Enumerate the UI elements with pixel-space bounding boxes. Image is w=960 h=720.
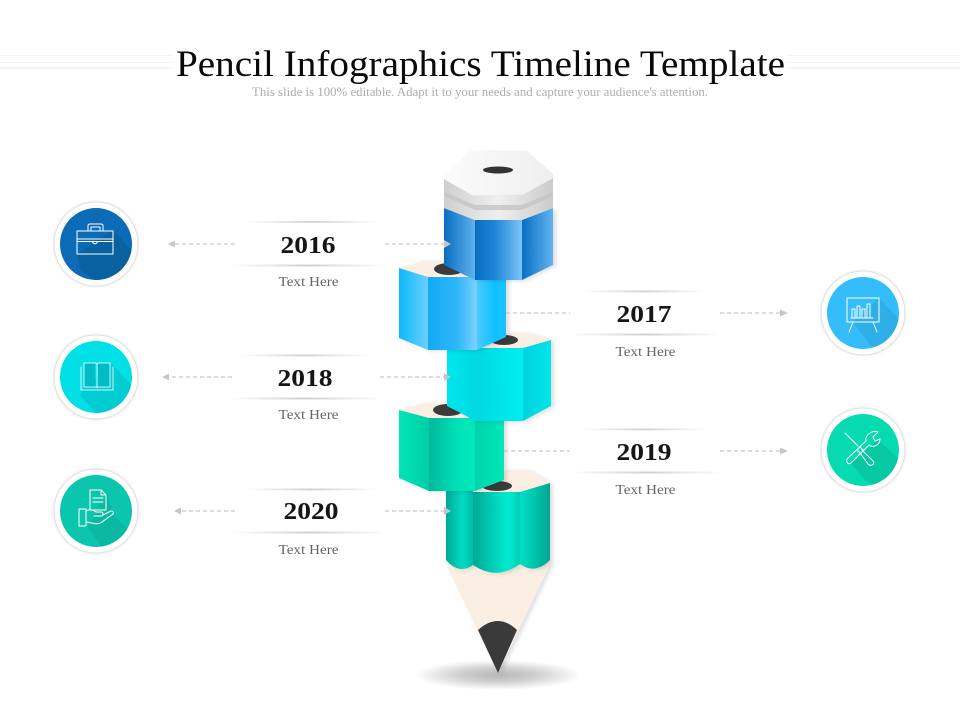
icon: open book: [52, 334, 140, 420]
ground shadow: [414, 660, 582, 690]
timeline entry 2017: [570, 290, 722, 359]
icon: presentation board: [822, 272, 905, 354]
segment 4: green: [399, 403, 504, 491]
arrows 2018: [162, 373, 451, 381]
timeline entry 2019: Text Here: [616, 482, 676, 497]
icon: briefcase: [54, 202, 140, 290]
timeline entry 2019: [570, 428, 722, 497]
segment 2: light blue: [399, 261, 506, 350]
pencil tip wood: [447, 560, 551, 673]
timeline entry 2020: 2020: [284, 498, 338, 525]
timeline entry 2020: [232, 488, 387, 557]
pencil: [399, 152, 582, 690]
arrows 2017: [506, 310, 788, 316]
segment 3: cyan: [447, 333, 551, 421]
icon: wrench and screwdriver: [822, 408, 905, 492]
eraser: [444, 152, 553, 220]
title: Pencil Infographics Timeline Template: [176, 44, 785, 85]
timeline entry 2017: Text Here: [616, 344, 676, 359]
segment 5: teal: [446, 470, 550, 573]
icon: hand with document: [52, 468, 140, 554]
timeline entry 2016: 2016: [280, 232, 336, 259]
header decorative lines: [0, 55, 960, 69]
pencil lead: [478, 621, 517, 673]
arrows 2016: [168, 240, 451, 248]
timeline entry 2018: [227, 354, 382, 422]
segment 1: dark blue: [444, 208, 553, 280]
timeline entry 2016: Text Here: [278, 274, 339, 289]
timeline entry 2016: [232, 221, 385, 289]
timeline entry 2018: 2018: [278, 365, 332, 392]
timeline entry 2017: 2017: [616, 301, 672, 328]
timeline entry 2018: Text Here: [278, 407, 339, 422]
timeline entry 2019: 2019: [616, 439, 672, 466]
arrows 2020: [174, 507, 451, 515]
timeline entry 2020: Text Here: [278, 542, 339, 557]
arrows 2019: [504, 448, 788, 454]
subtitle: This slide is 100% editable. Adapt it to your needs and capture your audience's attention.: [252, 85, 708, 99]
